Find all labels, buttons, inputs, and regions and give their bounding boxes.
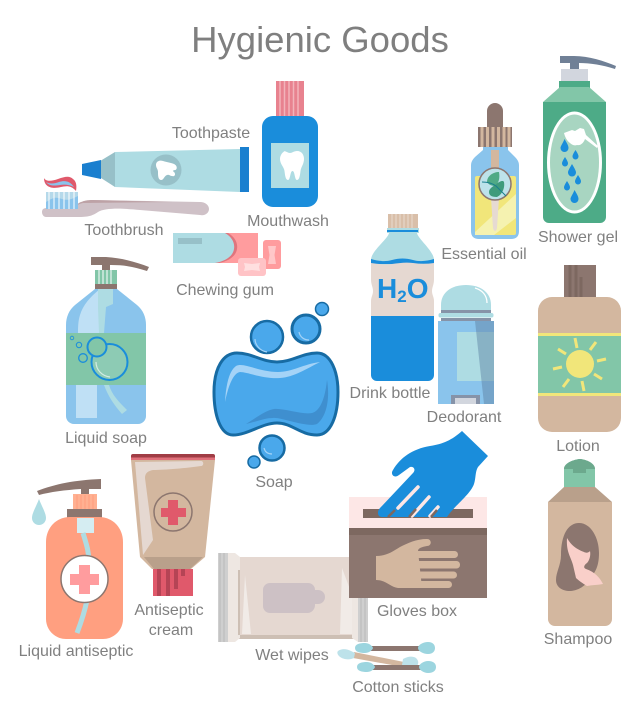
title: Hygienic Goods <box>191 19 449 60</box>
label: Mouthwash: Mouthwash <box>247 213 329 230</box>
label: Deodorant: Deodorant <box>427 409 502 426</box>
label: Toothpaste: Toothpaste <box>172 125 250 142</box>
label: Liquid soap: Liquid soap <box>65 430 147 447</box>
icon: shower gel <box>543 56 616 223</box>
label: Gloves box: Gloves box <box>377 603 457 620</box>
label: Shower gel: Shower gel <box>538 229 618 246</box>
icon: drink bottle: 2 <box>397 287 407 306</box>
icon: lotion <box>538 265 621 432</box>
icon: liquid antiseptic <box>32 479 123 639</box>
label: Essential oil: Essential oil <box>441 246 527 263</box>
icon: cotton sticks <box>337 642 436 673</box>
icon: essential oil <box>471 103 519 239</box>
icon: drink bottle: H <box>377 273 397 304</box>
icon: soap <box>214 302 338 468</box>
icon: shampoo <box>548 459 612 626</box>
label: Shampoo: Shampoo <box>544 631 612 648</box>
icon: gloves box <box>349 497 487 598</box>
icon: blue glove <box>378 431 488 517</box>
label: Antiseptic cream: Antiseptic <box>134 602 204 619</box>
icon: drink bottle <box>371 214 434 381</box>
label: Liquid antiseptic: Liquid antiseptic <box>19 643 133 660</box>
label: Chewing gum: Chewing gum <box>176 282 274 299</box>
icon: chewing gum <box>173 233 281 276</box>
label: Soap: Soap <box>255 474 293 491</box>
icon: mouthwash <box>262 81 318 207</box>
icon: drink bottle: O <box>407 273 428 304</box>
icon: liquid soap <box>66 257 149 424</box>
label: Lotion: Lotion <box>556 438 600 455</box>
label: Cotton sticks: Cotton sticks <box>352 679 444 696</box>
label: Wet wipes: Wet wipes <box>255 647 329 664</box>
label: Drink bottle: Drink bottle <box>350 385 431 402</box>
icon: wet wipes <box>218 553 368 642</box>
icon: toothbrush <box>42 177 209 217</box>
icon: deodorant <box>438 285 494 404</box>
label: Antiseptic cream: cream <box>149 622 193 639</box>
label: Toothbrush: Toothbrush <box>84 222 164 239</box>
icon: toothpaste <box>82 147 249 192</box>
icon: antiseptic cream <box>131 454 215 596</box>
